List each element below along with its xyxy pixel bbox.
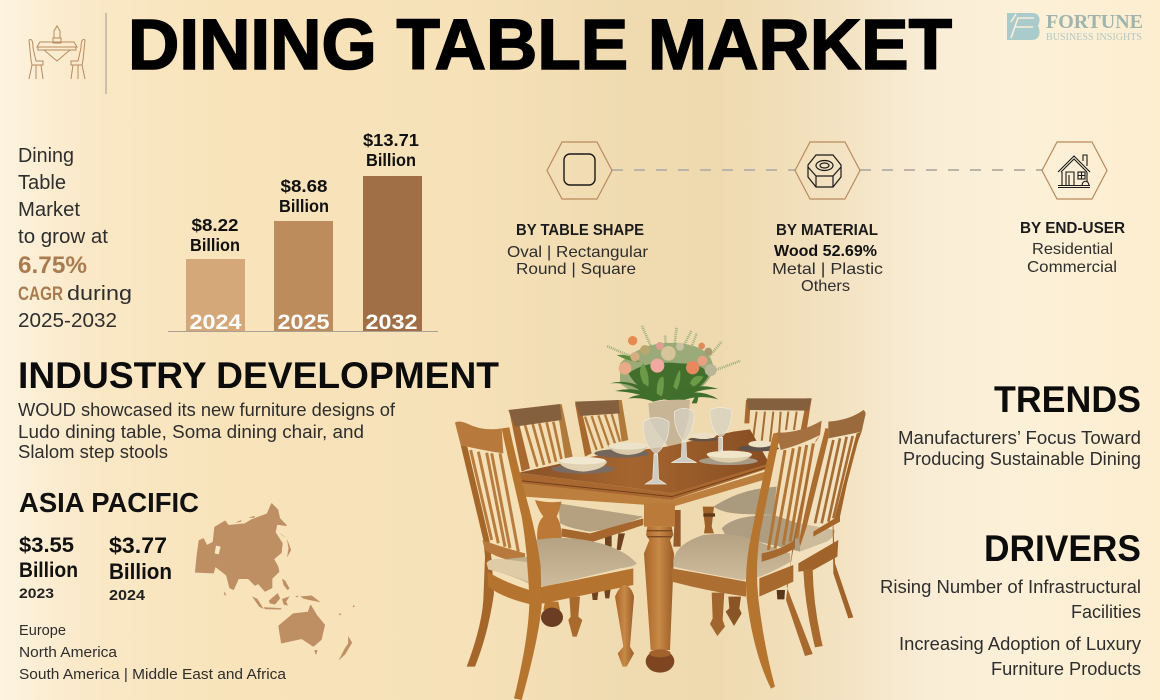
stat: 2024: $3.77 xyxy=(109,533,167,558)
icon: rounded square in hexagon xyxy=(547,142,612,199)
list: other regions xyxy=(19,623,287,683)
text block: drivers: Increasing Adoption of Luxury xyxy=(899,634,1141,654)
segment: by material xyxy=(772,142,883,295)
bar 2025: 2025 xyxy=(278,311,330,334)
center table leg xyxy=(644,503,675,673)
text block: trends: Manufacturers’ Focus Toward xyxy=(898,428,1141,448)
heading: industry development: INDUSTRY DEVELOPMENT xyxy=(18,355,499,396)
rear seats and rear table legs xyxy=(535,487,777,600)
CAGR text block: 6.75% xyxy=(18,252,87,279)
segment: by end-user: Residential xyxy=(1032,241,1113,258)
header divider xyxy=(105,13,107,94)
bar 2025 xyxy=(274,176,333,334)
text block: trends xyxy=(898,428,1141,469)
icon: hex nut in hexagon xyxy=(795,142,860,199)
stat: 2023: $3.55 xyxy=(19,534,74,557)
logo: Fortune Business Insights: FORTUNE xyxy=(1046,11,1143,33)
stat: 2023 xyxy=(19,534,78,601)
text block: industry development: WOUD showcased its new furniture designs of xyxy=(18,400,396,420)
list: other regions: South America | Middle East and Africa xyxy=(19,667,287,683)
CAGR text block: during xyxy=(67,283,132,305)
stat: 2024: 2024 xyxy=(109,587,146,604)
list: other regions: Europe xyxy=(19,623,66,639)
text block: drivers: Rising Number of Infrastructural xyxy=(880,577,1141,597)
stat: 2023: 2023 xyxy=(19,585,54,601)
front-right chair xyxy=(672,421,822,689)
heading: asia pacific: ASIA PACIFIC xyxy=(19,487,199,518)
bar 2032: $13.71 xyxy=(363,130,419,150)
CAGR text block: Market xyxy=(18,199,80,221)
stat: 2024: Billion xyxy=(109,559,172,584)
segment: by material: Metal | Plastic xyxy=(772,261,883,278)
stat: 2023: Billion xyxy=(19,559,78,582)
heading: trends: TRENDS xyxy=(994,379,1141,420)
back-right chair xyxy=(744,398,812,443)
segment: by end-user: Commercial xyxy=(1027,259,1117,276)
bar 2032: 2032 xyxy=(366,311,418,334)
bar 2025: $8.68 xyxy=(280,176,328,196)
segment: by material: Wood 52.69% xyxy=(774,243,877,260)
bar 2025: Billion xyxy=(279,196,329,216)
title: DINING TABLE MARKET xyxy=(128,6,952,85)
logo: Fortune Business Insights xyxy=(1007,11,1143,43)
text block: trends: Producing Sustainable Dining xyxy=(903,449,1141,469)
logo: Fortune Business Insights: BUSINESS INSIGHTS xyxy=(1046,32,1142,43)
stat: 2024 xyxy=(109,533,172,604)
CAGR text block: 2025-2032 xyxy=(18,310,117,332)
icon: house in hexagon xyxy=(1042,142,1107,199)
text block: drivers xyxy=(880,577,1141,679)
text block: drivers: Furniture Products xyxy=(991,659,1141,679)
CAGR text block: CAGR xyxy=(18,284,63,305)
flower bouquet and vase xyxy=(607,325,741,447)
segment: by table shape: BY TABLE SHAPE xyxy=(516,222,644,239)
text block: industry development xyxy=(18,400,396,462)
bar 2024: $8.22 xyxy=(192,215,239,235)
bar 2032: Billion xyxy=(366,150,416,170)
back-left chair xyxy=(508,404,573,472)
illustration: dining table with chairs xyxy=(455,325,866,700)
bar 2024 xyxy=(186,215,245,334)
bar 2024: Billion xyxy=(190,235,240,255)
far-right chair xyxy=(722,410,866,647)
segment: by table shape xyxy=(507,142,649,278)
heading: drivers: DRIVERS xyxy=(984,528,1141,569)
bar chart: market size xyxy=(168,130,438,334)
segment: by table shape: Oval | Rectangular xyxy=(507,244,649,261)
CAGR text block: Dining xyxy=(18,145,74,167)
list: other regions: North America xyxy=(19,645,118,661)
CAGR text block xyxy=(18,145,132,332)
header icon: dining table xyxy=(29,26,85,79)
back-middle chair xyxy=(575,400,628,457)
text block: industry development: Slalom step stools xyxy=(18,442,168,462)
segment: by table shape: Round | Square xyxy=(516,261,636,278)
segment: by end-user xyxy=(1020,142,1125,276)
text block: industry development: Ludo dining table, Soma dining chair, and xyxy=(18,422,364,442)
plates and glasses xyxy=(552,407,779,484)
CAGR text block: to grow at xyxy=(18,226,108,248)
bar 2032 xyxy=(363,130,422,334)
segment: by end-user: BY END-USER xyxy=(1020,220,1125,237)
front-left chair xyxy=(455,421,637,700)
map: asia pacific xyxy=(196,504,355,660)
segment: by material: BY MATERIAL xyxy=(776,222,878,239)
table top xyxy=(519,429,769,507)
bar 2024: 2024 xyxy=(190,311,242,334)
text block: drivers: Facilities xyxy=(1071,602,1141,622)
segment: by material: Others xyxy=(801,278,850,295)
CAGR text block: Table xyxy=(18,172,66,194)
